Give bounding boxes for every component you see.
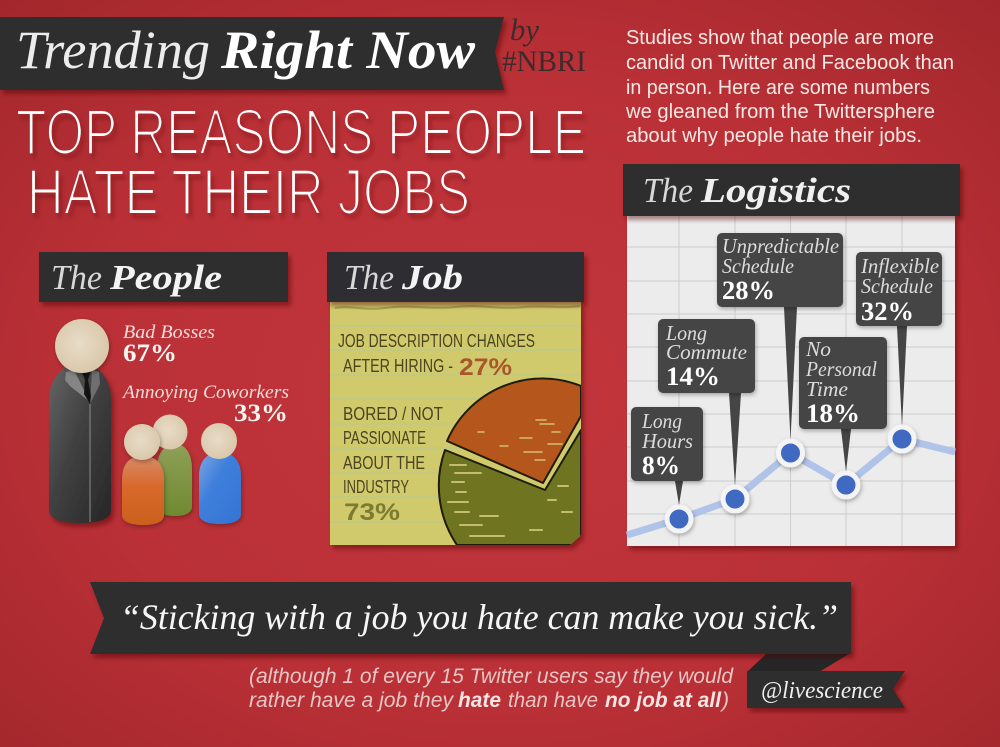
- callout: unpredictable schedule 28%: Unpredictable: [722, 234, 839, 258]
- source ribbon: @livescience: [747, 671, 905, 708]
- intro paragraph: in person. Here are some numbers: [626, 77, 930, 99]
- title banner: Trending: [16, 20, 210, 80]
- pie chart: [439, 379, 581, 545]
- main heading: [16, 96, 586, 228]
- sticky note paper: [330, 302, 581, 545]
- callout: long hours 8%: 8%: [642, 451, 680, 480]
- heading: the logistics: [623, 164, 960, 216]
- heading: the people: [39, 252, 288, 302]
- label: annoying coworkers 33%: Annoying Coworkers: [121, 382, 289, 403]
- callout: long commute 14%: [658, 319, 755, 393]
- icon: boss figure in suit: [49, 319, 111, 523]
- sub-quote note: (although 1 of every 15 Twitter users say they would: [249, 665, 734, 688]
- callout: inflexible schedule 32%: [856, 252, 942, 326]
- icon: coworker figures: [122, 414, 241, 525]
- callout: long commute 14%: 14%: [666, 362, 720, 391]
- callout: long hours 8%: Hours: [641, 429, 693, 453]
- panel: the job: [327, 252, 584, 545]
- text: job description changes 27%: [338, 331, 535, 381]
- text: bored not passionate 73%: ABOUT THE: [343, 453, 425, 473]
- callout: no personal time 18%: Time: [806, 377, 848, 401]
- title banner: [0, 17, 504, 90]
- heading: the people: People: [109, 258, 222, 297]
- callout: inflexible schedule 32%: 32%: [861, 297, 914, 326]
- heading: the job: [327, 252, 584, 302]
- intro paragraph: Studies show that people are more: [626, 27, 934, 49]
- callout: long hours 8%: Long: [641, 409, 682, 433]
- intro paragraph: [625, 27, 954, 147]
- panel: the people: [39, 252, 289, 525]
- sub-quote note: rather have a job they: [249, 689, 454, 712]
- text: bored not passionate 73%: 73%: [344, 499, 400, 526]
- slice: 73% green: [439, 430, 581, 545]
- byline: by #NBRI: #NBRI: [502, 45, 586, 78]
- text: job description changes 27%: 27%: [459, 354, 512, 381]
- sub-quote note: ): [719, 689, 729, 712]
- label: bad bosses 67%: Bad Bosses: [123, 322, 215, 343]
- callout: long commute 14%: Long: [665, 321, 707, 345]
- callout: unpredictable schedule 28%: [717, 233, 843, 307]
- sub-quote note: than have: [508, 689, 598, 712]
- label: bad bosses 67%: 67%: [123, 340, 177, 367]
- callout: long commute 14%: Commute: [666, 340, 747, 364]
- heading: the people: The: [51, 258, 102, 297]
- text: bored not passionate 73%: BORED / NOT: [343, 404, 443, 424]
- text: bored not passionate 73%: INDUSTRY: [343, 477, 409, 497]
- callout: no personal time 18%: No: [805, 337, 831, 361]
- heading: the job: Job: [401, 258, 463, 297]
- text: job description changes 27%: AFTER HIRING -: [343, 356, 453, 376]
- callout: long hours 8%: [631, 407, 703, 481]
- graph paper: [627, 216, 955, 546]
- quote ribbon: [90, 582, 851, 672]
- byline: by #NBRI: [502, 12, 586, 78]
- heading: the logistics: Logistics: [700, 171, 851, 210]
- main heading: TOP REASONS PEOPLE: [16, 96, 586, 168]
- text: job description changes 27%: JOB DESCRIPTION CHANGES: [338, 331, 535, 351]
- title banner: Right Now: [220, 20, 476, 80]
- label: bad bosses 67%: [123, 322, 215, 367]
- callout: unpredictable schedule 28%: 28%: [722, 276, 775, 305]
- main heading: HATE THEIR JOBS: [27, 156, 470, 228]
- text: bored not passionate 73%: PASSIONATE: [343, 428, 426, 448]
- line chart: [627, 307, 955, 535]
- data points: [667, 427, 914, 531]
- heading: the logistics: The: [643, 171, 693, 210]
- callout: no personal time 18%: Personal: [805, 357, 877, 381]
- byline: by #NBRI: by: [510, 12, 539, 47]
- intro paragraph: about why people hate their jobs.: [626, 125, 922, 147]
- callout pointers: [675, 307, 907, 505]
- sub-quote note: hate: [458, 689, 501, 712]
- heading: the job: The: [344, 258, 394, 297]
- quote ribbon: “Sticking with a job you hate can make you sick.”: [120, 597, 838, 637]
- label: annoying coworkers 33%: 33%: [234, 400, 288, 427]
- callout: inflexible schedule 32%: Inflexible: [860, 254, 939, 278]
- callout: inflexible schedule 32%: Schedule: [861, 274, 933, 298]
- callout: no personal time 18%: [799, 337, 887, 429]
- callout: no personal time 18%: 18%: [806, 399, 860, 428]
- label: annoying coworkers 33%: [121, 382, 289, 427]
- sub-quote note: no job at all: [605, 689, 722, 712]
- source ribbon: @livescience: @livescience: [761, 678, 883, 704]
- intro paragraph: we gleaned from the Twittersphere: [625, 101, 935, 123]
- slice: 27% orange: [447, 379, 581, 483]
- intro paragraph: candid on Twitter and Facebook than: [626, 52, 954, 74]
- sub-quote note: [249, 665, 734, 712]
- callout: unpredictable schedule 28%: Schedule: [722, 254, 794, 278]
- panel: the logistics: [623, 164, 960, 546]
- text: bored not passionate 73%: [343, 404, 443, 526]
